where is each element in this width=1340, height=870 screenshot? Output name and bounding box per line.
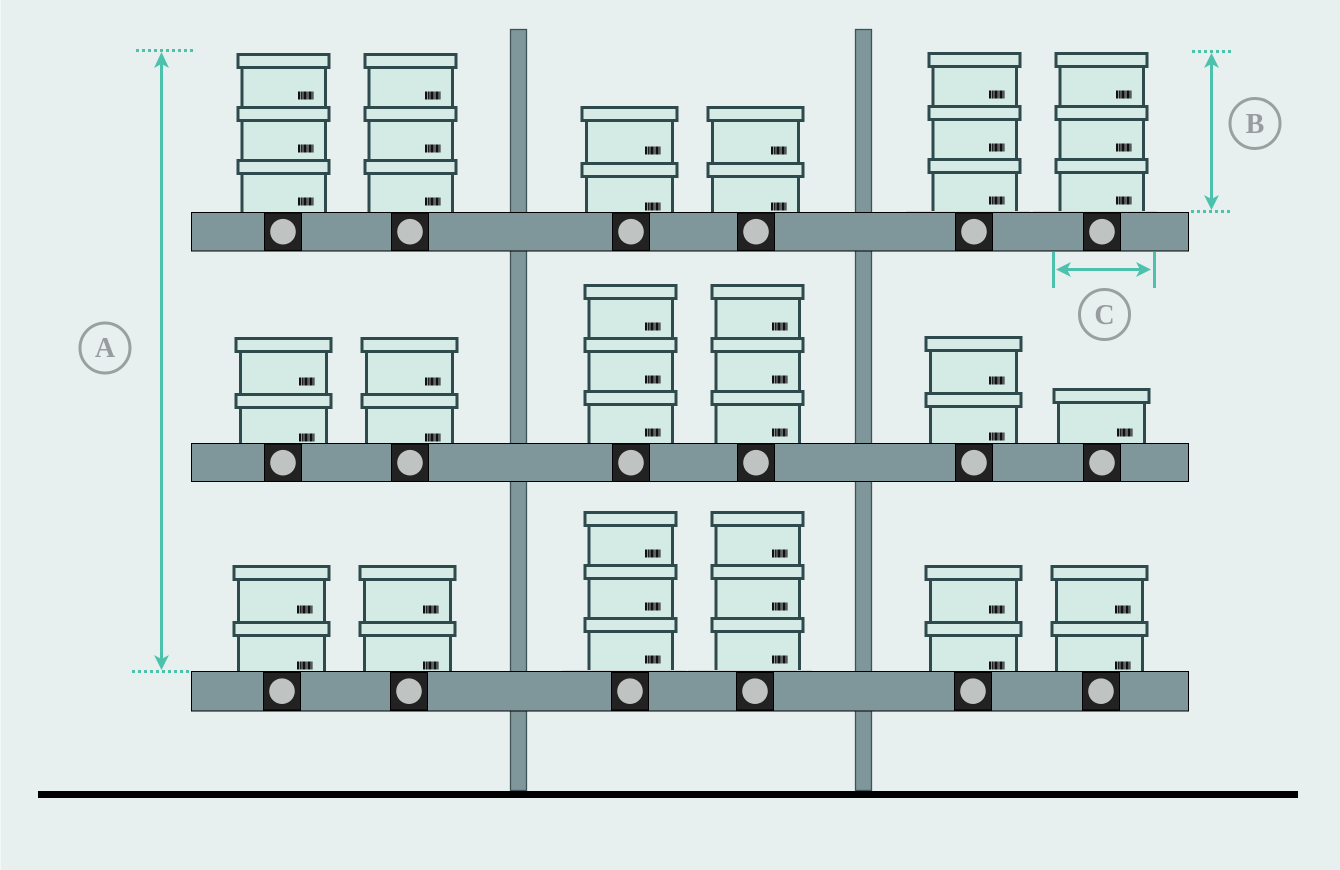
stack 4 [712, 512, 803, 670]
stack 1 [234, 566, 329, 677]
stack 5 [926, 566, 1021, 677]
stack 2 [362, 338, 457, 449]
stack 1 [236, 338, 331, 449]
stack 6 [1052, 566, 1147, 677]
tier 3 boxes [234, 512, 1147, 677]
stack 2 [360, 566, 455, 677]
floor line [38, 791, 1298, 798]
label C: C [1094, 300, 1115, 331]
stack 5 [926, 338, 1021, 448]
label B [1230, 98, 1280, 148]
stack 2 [365, 54, 456, 212]
tier 3 beam [192, 672, 1188, 711]
stack 3 [585, 512, 676, 670]
stack 1 [238, 54, 329, 212]
tier 2 beam [192, 444, 1188, 482]
tier 1 boxes [238, 54, 1147, 218]
tier 2 boxes [236, 286, 1149, 449]
stack 3 [582, 108, 677, 218]
label A: A [95, 333, 116, 364]
stack 4 [712, 286, 803, 443]
dimension A arrow [132, 50, 193, 672]
stack 5 [929, 54, 1020, 211]
rack upright right [856, 30, 872, 790]
rack upright left [510, 30, 526, 790]
stack 4 [708, 108, 803, 218]
dimension C arrow [1054, 252, 1154, 288]
stack 6 [1054, 390, 1149, 444]
stack 3 [585, 286, 676, 443]
tier 1 beam [192, 212, 1188, 251]
label B: B [1246, 109, 1264, 140]
label C [1080, 290, 1130, 340]
label A [80, 323, 130, 373]
stack 6 [1056, 54, 1147, 211]
dimension B arrow [1191, 52, 1231, 212]
